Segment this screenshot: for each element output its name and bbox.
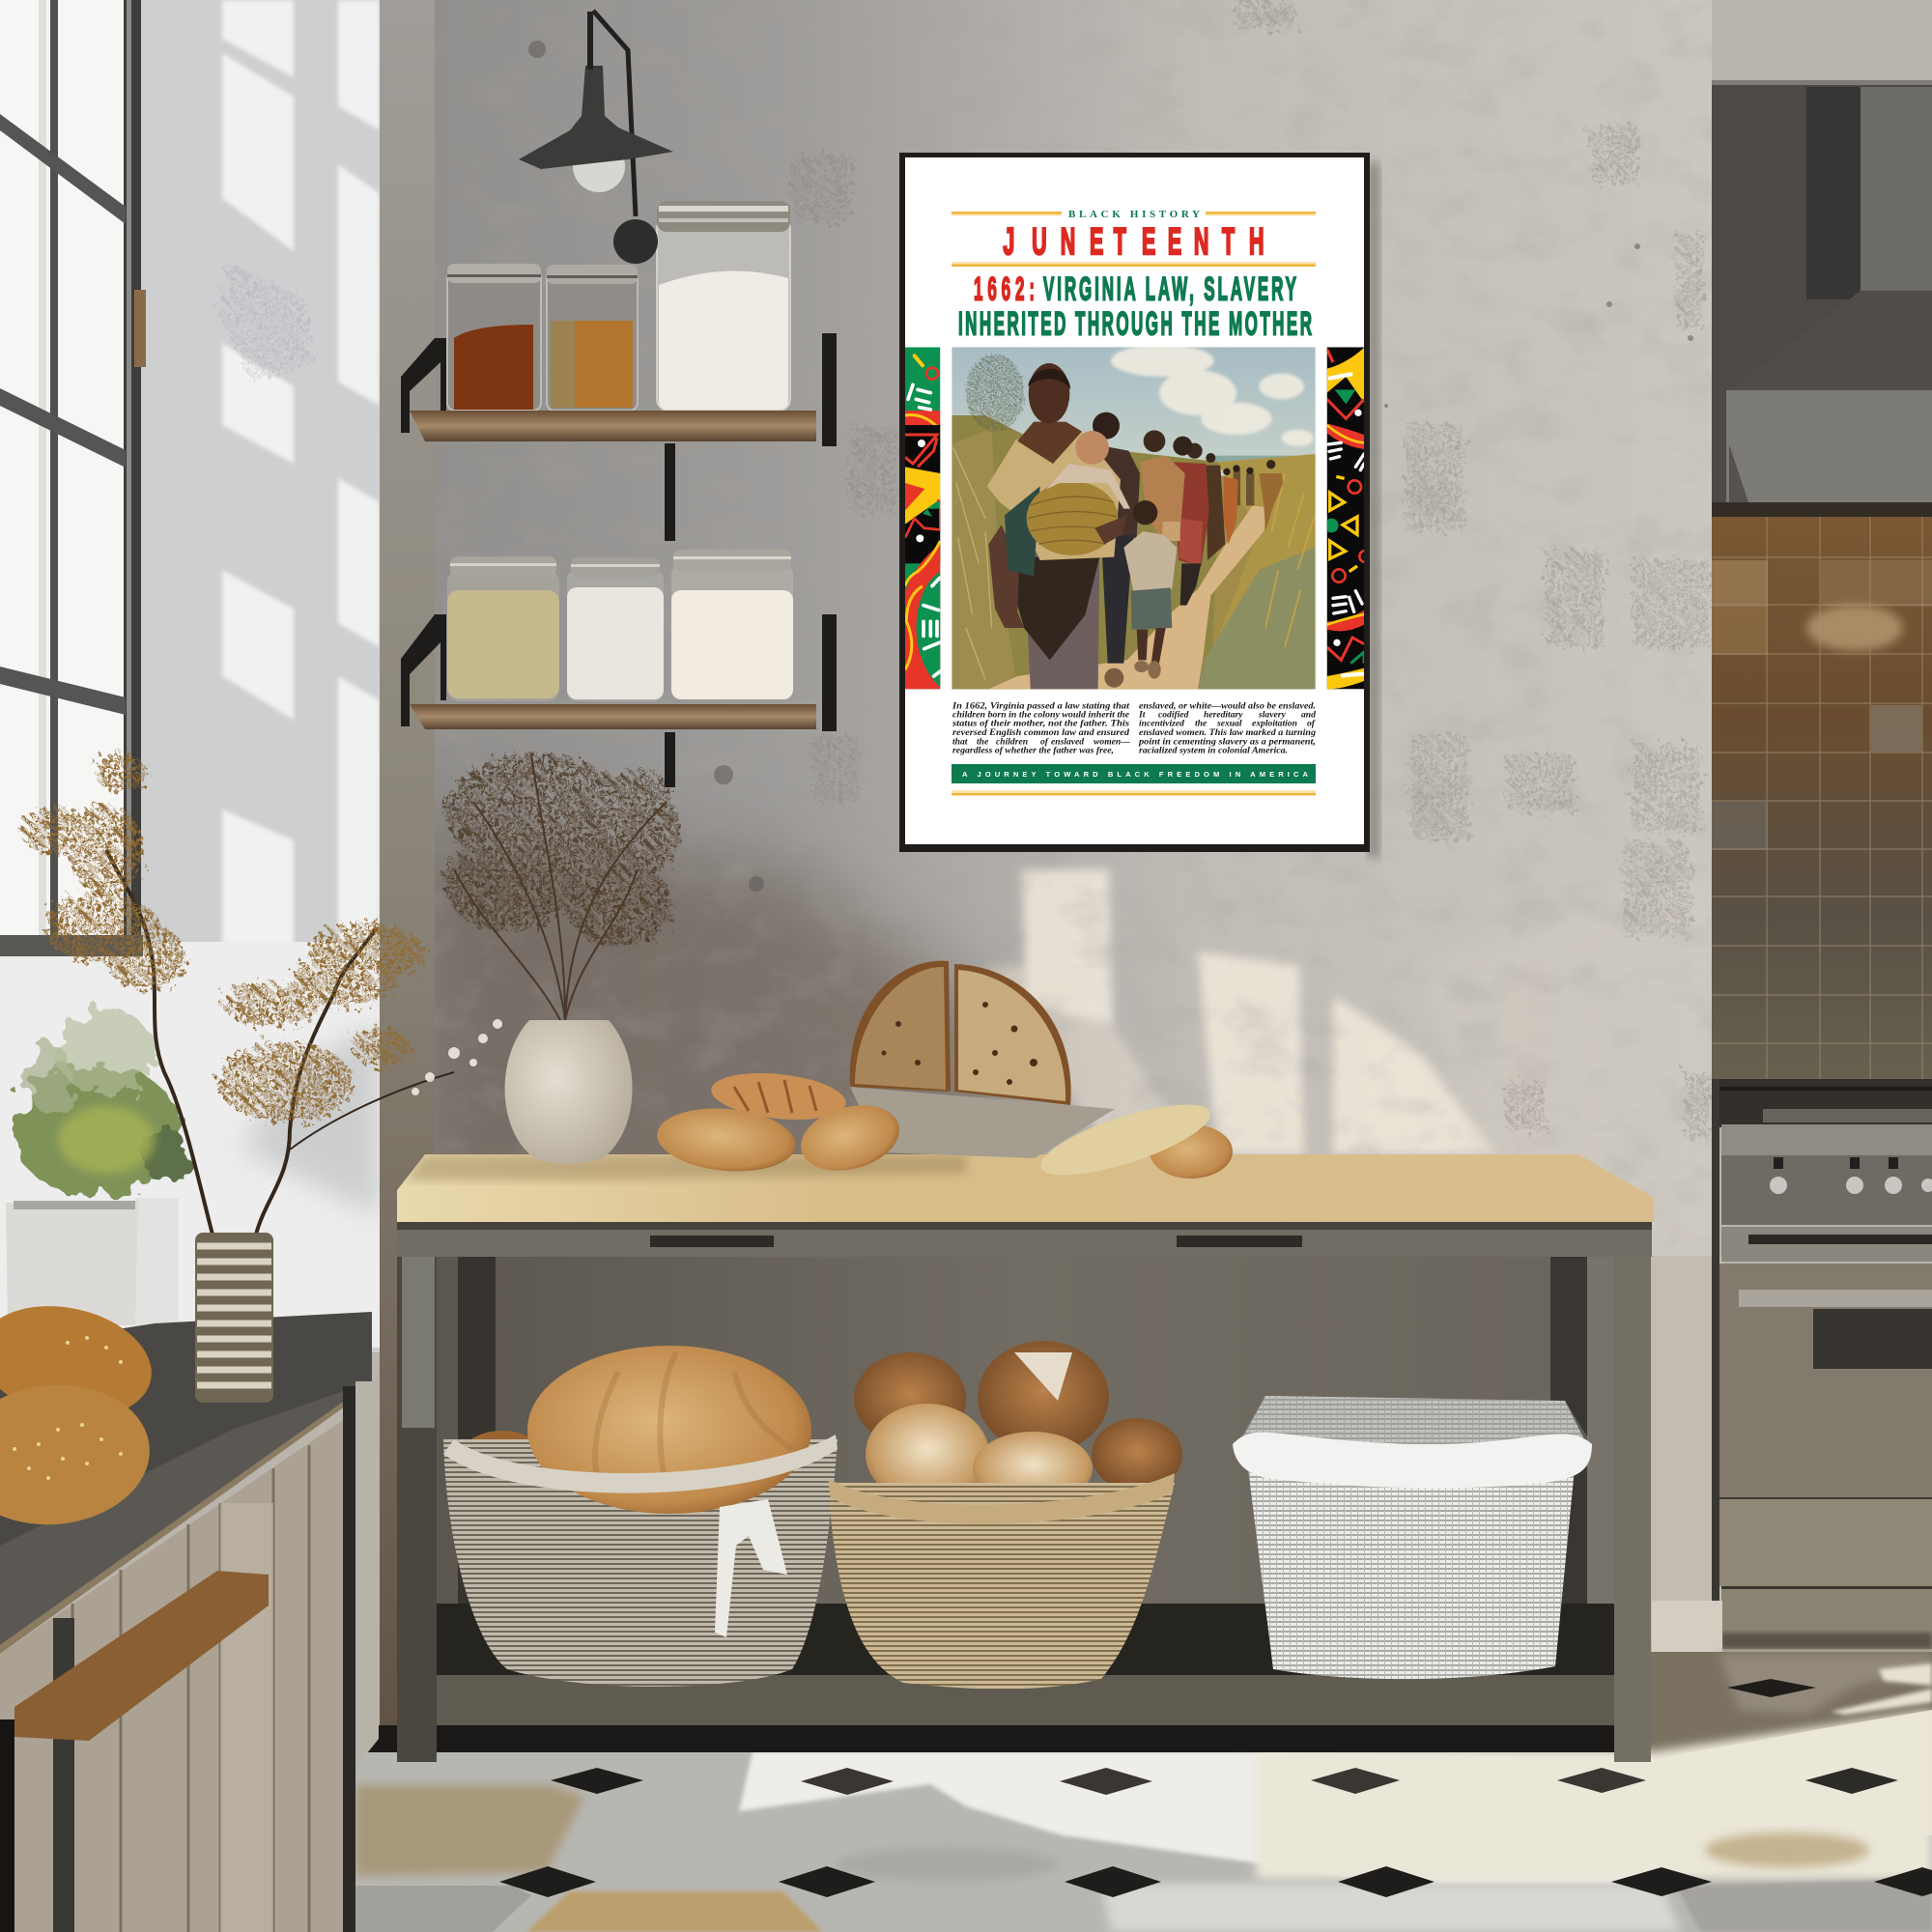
poster shadow <box>1368 162 1379 858</box>
ribbed vase body <box>195 1233 273 1403</box>
body text column right: enslaved, or white—would also be enslaved. <box>1139 700 1316 711</box>
stove <box>1712 1079 1932 1649</box>
wall weathering patches <box>792 0 1710 1140</box>
grass left <box>952 415 1220 689</box>
cut loaf <box>850 961 1071 1105</box>
body text column right: incentivized <box>1139 719 1184 729</box>
dried branches behind vase <box>444 753 681 1020</box>
kitchen counter <box>0 1312 372 1654</box>
left pattern strip <box>905 347 940 689</box>
jar amber <box>447 264 541 411</box>
framed poster <box>899 153 1379 858</box>
body text column right: hereditary <box>1204 709 1243 721</box>
brackets <box>401 333 837 541</box>
lower shelf surface <box>437 1604 1614 1677</box>
painting: enslaved mother and children walking a path <box>952 345 1316 689</box>
body text column left: reversed English common law and ensured <box>952 727 1129 738</box>
skirting <box>1652 1601 1722 1654</box>
corner pillar <box>380 0 435 1768</box>
jar spice <box>547 265 638 411</box>
white vase <box>505 1020 633 1164</box>
poster frame <box>899 153 1370 852</box>
body text column right: of <box>1307 719 1316 729</box>
body text column left: enslaved <box>1051 736 1084 747</box>
second woman and followers <box>1140 430 1209 606</box>
body text column left: the <box>977 736 989 747</box>
jar flour <box>671 550 793 699</box>
dried stems <box>106 850 454 1235</box>
headline: INHERITED THROUGH THE MOTHER <box>958 305 1312 342</box>
body text column right: racialized system in colonial America. <box>1139 746 1288 755</box>
body text column left: that <box>952 736 968 747</box>
body text column left: children born in the colony would inherit the <box>952 709 1130 721</box>
clouds <box>1111 345 1314 446</box>
bottom rule <box>952 790 1316 796</box>
body text column right: slavery <box>1258 709 1286 721</box>
body text column left: of <box>1040 736 1049 747</box>
body text column left: regardless of whether the father was free, <box>952 746 1114 755</box>
body text column left: In 1662, Virginia passed a law stating that <box>952 700 1129 711</box>
body text column right: point in cementing slavery as a permanent, <box>1138 736 1316 747</box>
body text column right: the <box>1195 719 1208 729</box>
body text column right: It <box>1138 709 1146 721</box>
boy <box>1123 500 1177 679</box>
back wall <box>380 0 1724 1642</box>
body text column left <box>952 700 1130 755</box>
sunlit floor <box>739 1751 1662 1884</box>
body text column right <box>1138 700 1316 755</box>
top rule right <box>1206 212 1316 216</box>
shelf 2 with jars <box>401 550 837 787</box>
body text column right: exploitation <box>1252 719 1297 729</box>
wall mottling <box>491 48 1712 1172</box>
table top <box>397 1154 1654 1222</box>
shelf board <box>410 411 816 441</box>
body text column right: and <box>1301 709 1316 721</box>
floor <box>355 1652 1932 1932</box>
wooden handle <box>14 1571 269 1741</box>
path <box>988 505 1267 689</box>
jar sugar <box>567 557 664 701</box>
top rule left <box>952 212 1062 216</box>
rule under title <box>952 262 1316 267</box>
headline: VIRGINIA LAW, SLAVERY <box>1043 270 1296 307</box>
left wall with window light <box>0 0 380 1352</box>
green banner: A JOURNEY TOWARD BLACK FREEDOM IN AMERICA <box>962 770 1309 779</box>
left basket with bread <box>443 1346 838 1687</box>
poster paper <box>905 157 1364 844</box>
table apron <box>397 1222 1652 1257</box>
right pattern strip <box>1327 347 1364 690</box>
man behind woman <box>1093 412 1140 688</box>
shelf 1 with jars <box>401 201 837 541</box>
body text column right: codified <box>1158 709 1189 721</box>
headline: 1662: <box>974 270 1035 307</box>
jar flour large <box>657 201 790 411</box>
ribbed vase with dried stems <box>19 753 502 1403</box>
body text column right: sexual <box>1216 719 1242 729</box>
baby <box>1046 464 1130 509</box>
basket <box>1027 481 1118 555</box>
table <box>355 1154 1654 1762</box>
table front legs <box>397 1254 437 1762</box>
table back legs <box>458 1256 496 1613</box>
floor diamonds <box>499 1679 1932 1897</box>
body text column left: status of their mother, not the father. This <box>952 719 1129 729</box>
middle basket with bread <box>828 1341 1182 1689</box>
grass right <box>1198 454 1316 689</box>
distant figures <box>1206 453 1283 560</box>
wall tiles <box>1712 517 1932 1082</box>
green banner <box>952 764 1316 783</box>
body text column left: children <box>996 736 1028 747</box>
range hood <box>1712 80 1932 517</box>
headline <box>958 270 1312 342</box>
loaves on counter <box>0 1292 162 1532</box>
body text column left: women— <box>1094 736 1130 747</box>
wooden cabinet <box>0 1381 379 1932</box>
jar grain <box>447 556 559 701</box>
white basket <box>1233 1396 1592 1679</box>
rolls on table <box>654 1067 1233 1189</box>
knife <box>850 1087 1115 1158</box>
title JUNETEENTH: JUNETEENTH <box>1003 220 1264 263</box>
eyebrow text: BLACK HISTORY <box>1068 209 1200 220</box>
floor tiles and stains <box>355 1785 584 1876</box>
plant and white pot <box>6 1009 188 1328</box>
mother <box>987 363 1130 689</box>
under-table wall <box>437 1256 1614 1613</box>
window <box>0 0 146 956</box>
wall lamp <box>519 11 673 264</box>
body text column right: enslaved women. This law marked a turning <box>1139 727 1316 738</box>
